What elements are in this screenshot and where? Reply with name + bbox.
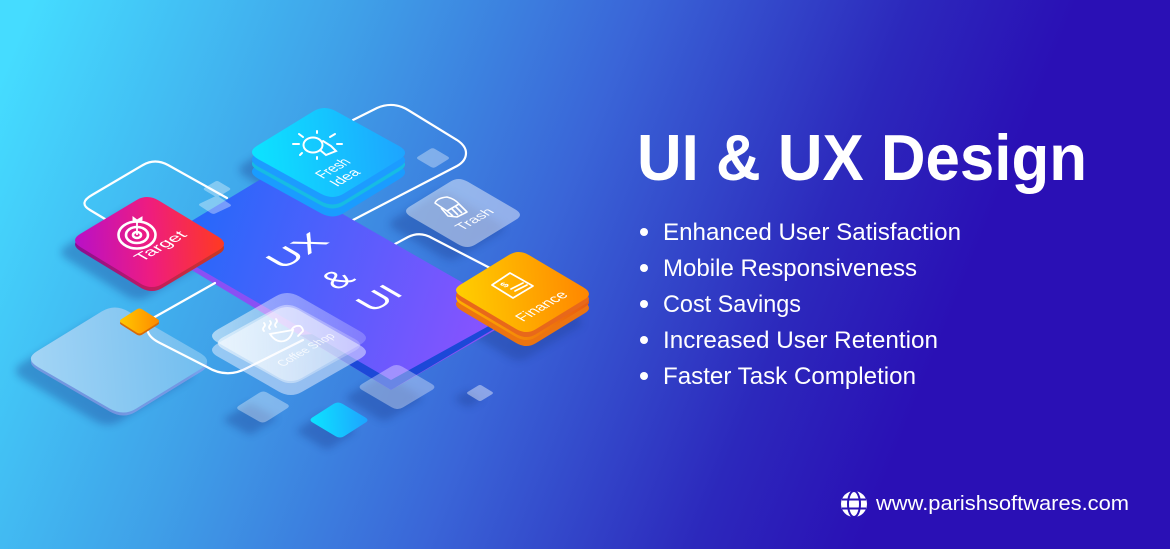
icon: coffee cup: [263, 319, 303, 341]
tile: finance: [453, 250, 592, 348]
isometric illustration: [12, 105, 592, 449]
list item 1: Enhanced User Satisfaction: [663, 219, 961, 246]
icon: invoice: $: [498, 281, 513, 290]
large glass panel: [27, 307, 211, 416]
icon: target: [118, 217, 156, 248]
small cyan tile: [310, 402, 368, 438]
main plate: UX & UI: [155, 173, 514, 390]
tile label: Finance: Finance: [512, 289, 572, 324]
orange chip: [120, 309, 159, 335]
list item 4: Increased User Retention: [663, 327, 938, 354]
icon: trash bin: [435, 197, 467, 217]
website url: www.parishsoftwares.com: [875, 493, 1129, 515]
icon: light bulb: [293, 131, 342, 159]
tile label: Idea: Idea: [326, 166, 365, 189]
small glass tile near trash: [417, 148, 449, 168]
connector lines behind tiles: [84, 105, 490, 268]
small glass tiles near target: [197, 181, 233, 214]
tile: trash: [402, 177, 524, 249]
small glass tiles bottom: [237, 365, 493, 423]
tile label: Fresh: Fresh: [312, 156, 355, 181]
title: UI & UX Design: [637, 121, 1087, 194]
plate label UX: UX: [257, 227, 337, 274]
list item 5: Faster Task Completion: [663, 363, 916, 390]
icon: globe: [841, 491, 867, 517]
tile: target: [73, 195, 226, 293]
tile label: Trash: Trash: [451, 205, 498, 233]
tile: fresh idea: [248, 108, 409, 216]
list item 2: Mobile Responsiveness: [663, 255, 917, 282]
soft shadows: [12, 126, 585, 449]
feature list: [640, 219, 961, 390]
plate label ampersand: &: [311, 264, 364, 295]
list item 3: Cost Savings: [663, 291, 801, 318]
tile: coffee shop: [211, 292, 367, 396]
tile label: Target: Target: [131, 229, 192, 264]
connector from orange chip: [148, 283, 303, 373]
tile label: Coffee Shop: Coffee Shop: [273, 331, 338, 369]
plate label UI: UI: [347, 279, 411, 317]
